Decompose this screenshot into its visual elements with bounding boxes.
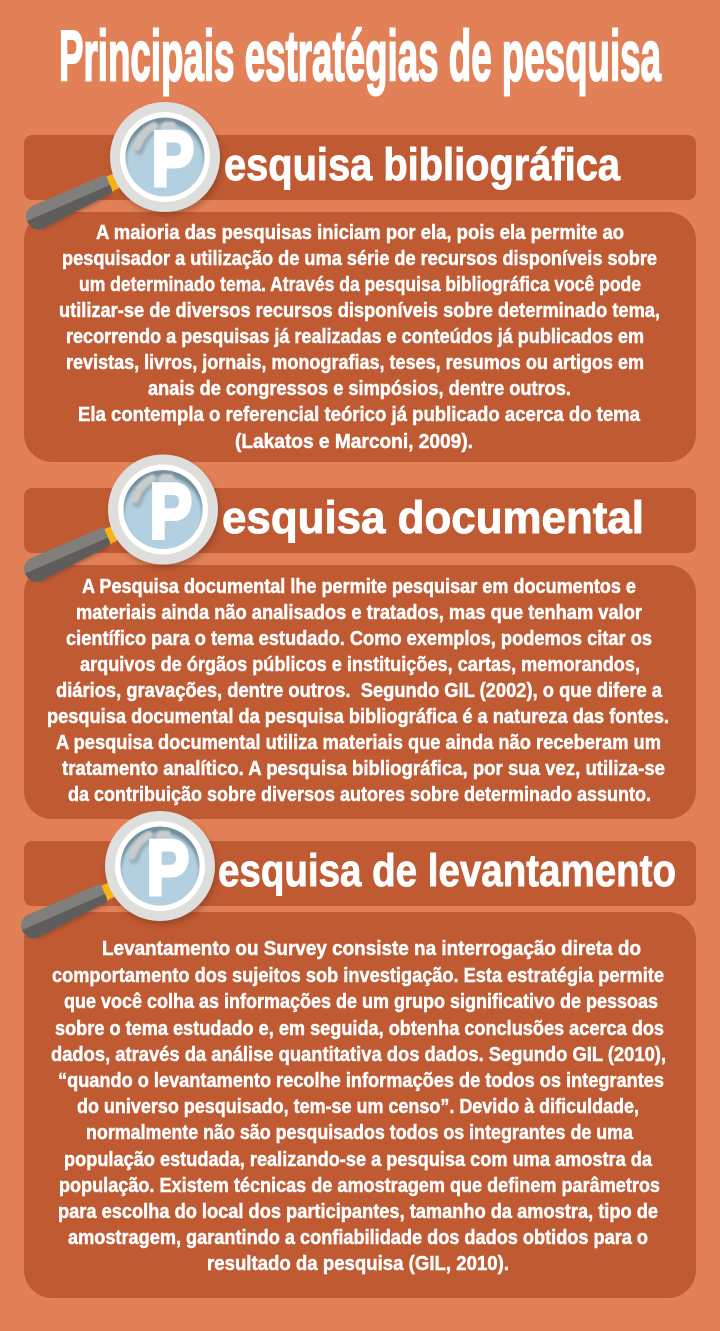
body text: população estudada, realizando-se a pesquisa com uma amostra da <box>64 1148 653 1171</box>
body text: diários, gravações, dentre outros. Segundo GIL (2002), o que difere a <box>56 679 663 702</box>
text panel <box>24 565 696 819</box>
heading band <box>24 488 696 553</box>
icon: magnifying glass with P: P <box>150 467 192 555</box>
text panel <box>24 912 696 1298</box>
icon: magnifying glass with P: P <box>152 114 194 202</box>
icon: magnifying glass with P <box>24 454 220 582</box>
body text: resultado da pesquisa (GIL, 2010). <box>207 1252 509 1275</box>
body text: A pesquisa documental utiliza materiais que ainda não receberam um <box>56 731 661 754</box>
body text <box>47 575 669 806</box>
body text: Ela contempla o referencial teórico já publicado acerca do tema <box>78 403 641 426</box>
icon: magnifying glass with P <box>21 811 217 939</box>
body text <box>59 221 660 453</box>
body text: (Lakatos e Marconi, 2009). <box>235 430 473 453</box>
section: pesquisa bibliográfica <box>24 102 696 462</box>
body text: arquivos de órgãos públicos e instituições, cartas, memorandos, <box>80 653 640 676</box>
section: pesquisa de levantamento <box>21 811 696 1298</box>
body text: materiais ainda não analisados e tratados, mas que tenham valor <box>76 601 642 624</box>
body text <box>51 937 666 1275</box>
heading band <box>24 841 696 906</box>
body text: recorrendo a pesquisas já realizadas e conteúdos já publicados em <box>66 325 644 348</box>
body text: normalmente não são pesquisados todos os integrantes de uma <box>86 1121 634 1144</box>
body text: da contribuição sobre diversos autores sobre determinado assunto. <box>68 783 651 806</box>
heading: esquisa bibliográfica <box>224 139 621 190</box>
body text: revistas, livros, jornais, monografias, teses, resumos ou artigos em <box>66 351 644 374</box>
body text: científico para o tema estudado. Como exemplos, podemos citar os <box>66 627 652 650</box>
body text: anais de congressos e simpósios, dentre outros. <box>148 377 571 400</box>
icon: magnifying glass with P <box>26 102 222 230</box>
body text: amostragem, garantindo a confiabilidade dos dados obtidos para o <box>68 1226 648 1249</box>
body text: tratamento analítico. A pesquisa bibliográfica, por sua vez, utiliza-se <box>62 757 665 780</box>
heading: esquisa documental <box>222 492 644 543</box>
text panel <box>24 212 696 462</box>
body text: um determinado tema. Através da pesquisa bibliográfica você pode <box>79 273 641 296</box>
body text: pesquisador a utilização de uma série de recursos disponíveis sobre <box>62 247 657 270</box>
body text: população. Existem técnicas de amostragem que definem parâmetros <box>59 1174 660 1197</box>
icon: magnifying glass with P: P <box>146 824 189 912</box>
section: pesquisa documental <box>24 454 696 819</box>
body text: A maioria das pesquisas iniciam por ela, pois ela permite ao <box>96 221 624 244</box>
body text: do universo pesquisado, tem-se um censo”. Devido à dificuldade, <box>77 1095 639 1118</box>
body text: A Pesquisa documental lhe permite pesquisar em documentos e <box>82 575 636 598</box>
body text: utilizar-se de diversos recursos disponíveis sobre determinado tema, <box>59 299 660 322</box>
heading band <box>24 135 696 200</box>
body text: Levantamento ou Survey consiste na interrogação direta do <box>102 937 641 960</box>
body text: dados, através da análise quantitativa dos dados. Segundo GIL (2010), <box>51 1043 666 1066</box>
body text: para escolha do local dos participantes, tamanho da amostra, tipo de <box>58 1200 658 1223</box>
